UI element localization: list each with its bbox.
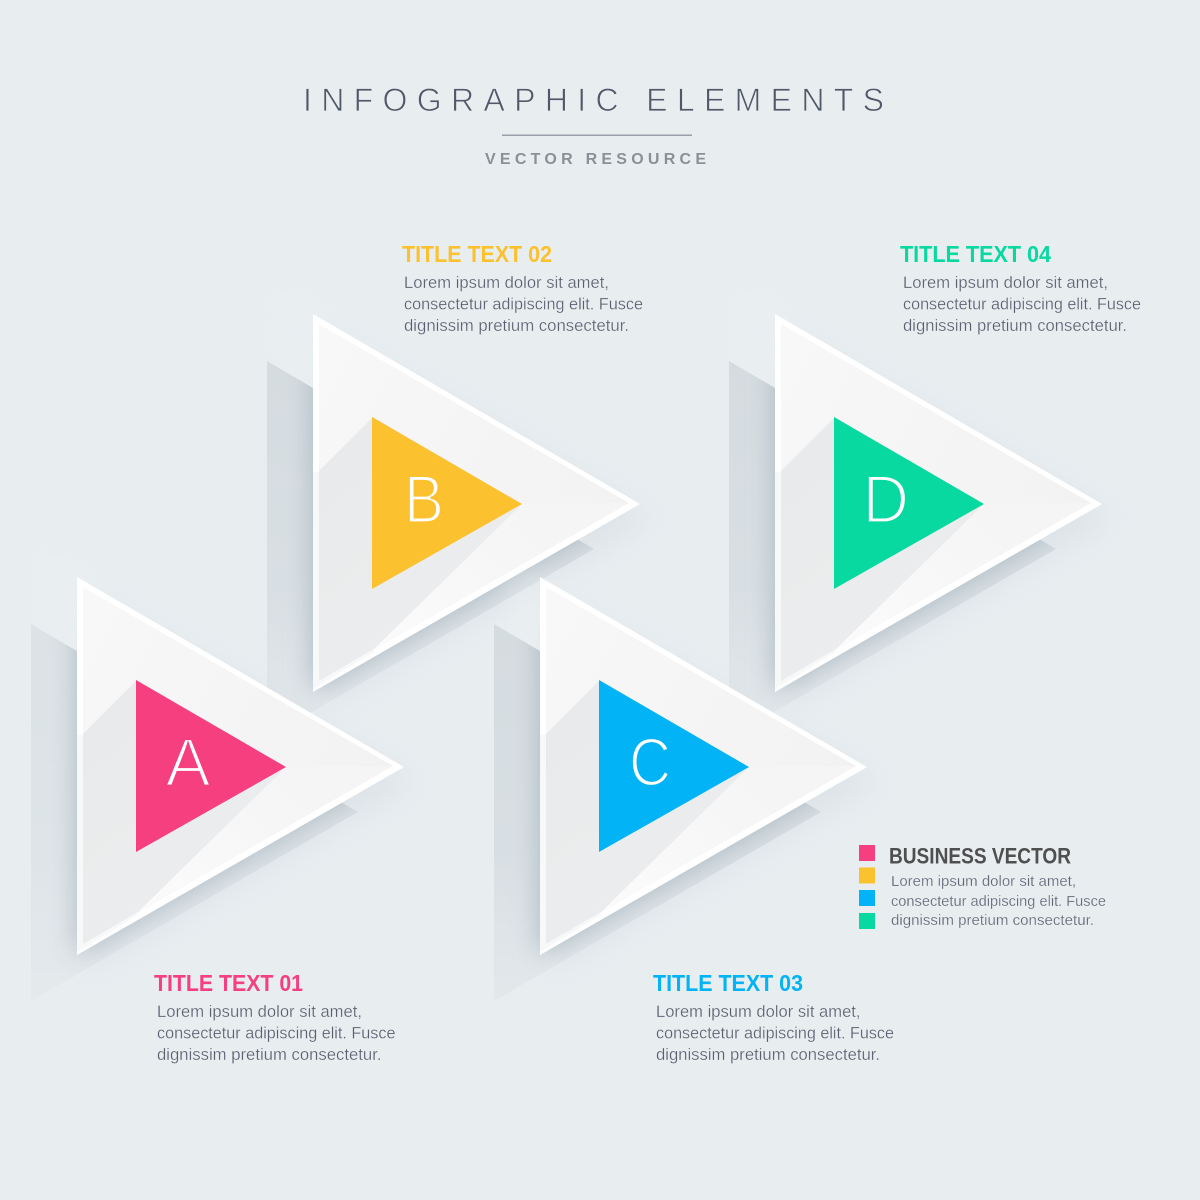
legend: business vector [859,844,1106,929]
text block: title text 03 [653,970,894,1064]
text block: title text 02 [402,241,643,335]
icon: green triangle [834,417,984,589]
text block: title text 01: Lorem ipsum dolor sit amet, [157,1003,362,1021]
legend text: Lorem ipsum dolor sit amet, [891,873,1076,890]
letter A: A [166,724,211,800]
text block: title text 02: consectetur adipiscing elit. Fusce [404,296,643,314]
text block: title text 03: consectetur adipiscing elit. Fusce [656,1024,894,1042]
legend text: dignissim pretium consectetur. [891,912,1094,929]
subtitle: VECTOR RESOURCE [485,151,706,168]
text block: title text 01: dignissim pretium consectetur. [157,1046,382,1064]
text block: title text 04: TITLE TEXT 04 [900,241,1051,267]
text block: title text 02: Lorem ipsum dolor sit amet, [404,274,609,292]
icon: yellow triangle [372,417,522,589]
letter D: D [862,462,909,538]
panel: triangle A [31,577,404,970]
legend text [891,873,1106,929]
text block: title text 03: Lorem ipsum dolor sit amet, [656,1003,860,1021]
text block: title text 01 [154,970,396,1064]
text block: title text 01: consectetur adipiscing elit. Fusce [157,1024,396,1042]
title divider [502,134,692,136]
text block: title text 02: TITLE TEXT 02 [402,241,552,267]
text block: title text 04: dignissim pretium consectetur. [903,317,1127,335]
text block: title text 03: TITLE TEXT 03 [653,970,803,996]
legend text: consectetur adipiscing elit. Fusce [891,893,1106,910]
text block: title text 04 [900,241,1141,335]
icon: pink triangle [136,680,286,852]
text block: title text 02: dignissim pretium consectetur. [404,317,629,335]
text block: title text 03: dignissim pretium consectetur. [656,1046,880,1064]
legend colour swatches [859,845,875,929]
panel: triangle B [267,314,640,710]
text block: title text 04: Lorem ipsum dolor sit amet, [903,274,1108,292]
legend heading: BUSINESS VECTOR [889,844,1071,868]
panel: triangle D [729,314,1102,710]
title: INFOGRAPHIC ELEMENTS [303,82,884,118]
icon: blue triangle [599,680,749,852]
panel: triangle C [494,577,866,974]
letter C: C [629,724,671,800]
text block: title text 04: consectetur adipiscing elit. Fusce [903,296,1141,314]
text block: title text 01: TITLE TEXT 01 [154,970,303,996]
letter B: B [404,462,444,538]
